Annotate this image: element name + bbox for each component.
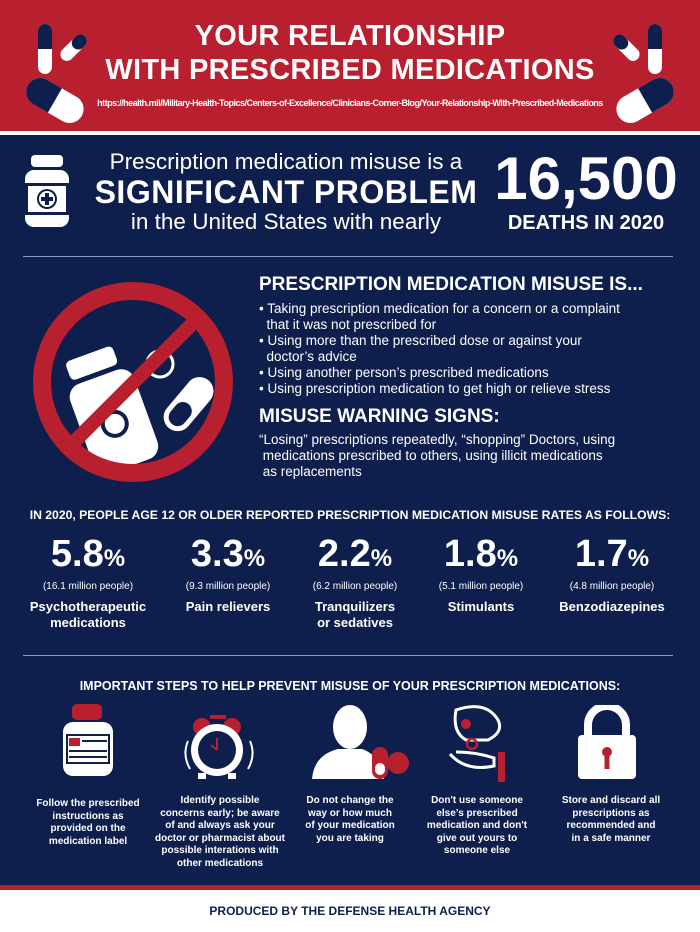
step 2: Identify possible (181, 795, 259, 806)
stat 2: (9.3 million people) (186, 581, 270, 592)
section: misuse definition: PRESCRIPTION MEDICATION MISUSE IS... (259, 274, 643, 295)
step 2: possible interations with (161, 845, 279, 856)
stat 5 (559, 533, 665, 614)
intro text: in the United States with nearly (131, 209, 441, 234)
step 3 (305, 795, 395, 844)
icon: person with pills (312, 705, 409, 779)
stat 1: (16.1 million people) (43, 581, 133, 592)
step 1: provided on the (50, 823, 126, 834)
step 4: someone else (444, 845, 510, 856)
title: YOUR RELATIONSHIP (195, 20, 505, 52)
step 1: medication label (49, 836, 127, 846)
stat 4: (5.1 million people) (439, 581, 523, 592)
intro text: Prescription medication misuse is a (110, 149, 462, 174)
step 3: way or how much (308, 808, 392, 818)
icon: no-sign over medications (33, 282, 233, 482)
step 1: Follow the prescribed (36, 798, 140, 809)
step 4: else’s prescribed (436, 808, 518, 818)
stat 3: 2.2% (318, 533, 392, 575)
section: misuse definition: medications prescribed to others, using illicit medications (263, 448, 603, 463)
step 1 (36, 798, 140, 846)
stat 2: 3.3% (191, 533, 265, 575)
stat 2: Pain relievers (186, 599, 270, 614)
stat 3 (313, 533, 397, 630)
step 5: Store and discard all (562, 795, 660, 806)
step texts (36, 795, 660, 868)
stat 3: (6.2 million people) (313, 581, 397, 592)
section: misuse definition: as replacements (263, 464, 362, 479)
step 4: medication and don't (427, 820, 527, 831)
stat 1: Psychotherapeutic (30, 599, 146, 614)
icon: padlock (578, 705, 636, 779)
step 2 (155, 795, 285, 868)
header band (0, 0, 700, 131)
heading: prevention steps: IMPORTANT STEPS TO HELP PREVENT MISUSE OF YOUR PRESCRIPTION MEDICATIONS: (80, 679, 620, 693)
icon: labeled bottle (63, 704, 113, 776)
step 5 (562, 795, 660, 844)
step 4 (427, 795, 527, 856)
step 4: Don't use someone (431, 795, 523, 806)
icon: alarm clock (184, 715, 254, 779)
step 3: of your medication (305, 820, 395, 831)
section: misuse definition: that it was not prescribed for (266, 317, 436, 332)
section: misuse definition: • Using prescription medication to get high or relieve stress (259, 381, 610, 396)
icon: bottle (25, 155, 69, 227)
heading: 2020 rates: IN 2020, PEOPLE AGE 12 OR OLDER REPORTED PRESCRIPTION MEDICATION MISUSE RATES AS FOLLOWS: (30, 508, 670, 522)
step 5: recommended and (567, 820, 655, 831)
stat 4: 1.8% (444, 533, 518, 575)
intro text: SIGNIFICANT PROBLEM (95, 174, 477, 210)
stat: 16,500 deaths: 16,500 (494, 145, 678, 212)
stat 4: Stimulants (448, 599, 514, 614)
stat 3: or sedatives (317, 615, 393, 630)
section: misuse definition (259, 274, 643, 479)
step 4: give out yours to (437, 832, 517, 844)
stats row (30, 533, 665, 630)
stat: 16,500 deaths: DEATHS IN 2020 (508, 212, 664, 234)
step 2: doctor or pharmacist about (155, 832, 285, 844)
stat 5: Benzodiazepines (559, 599, 665, 614)
step 3: Do not change the (306, 795, 394, 806)
stat 1 (30, 533, 146, 630)
title (105, 20, 595, 86)
section: misuse definition: MISUSE WARNING SIGNS: (259, 406, 500, 427)
section: misuse definition: • Using another person’s prescribed medications (259, 365, 549, 380)
title: WITH PRESCRIBED MEDICATIONS (105, 54, 595, 86)
step 2: concerns early; be aware (160, 808, 280, 818)
section: misuse definition: “Losing” prescriptions repeatedly, “shopping” Doctors, using (259, 432, 615, 447)
url: https://health.mil/Military-Health-Topics/Centers-of-Excellence/Clinicians-Corner-Blog/Your-Relationship-With-Prescribed-Medications (97, 98, 603, 108)
icon: pills left (26, 24, 87, 123)
section: misuse definition: • Using more than the prescribed dose or against your (259, 333, 582, 348)
step 5: in a safe manner (572, 832, 650, 844)
icon: pills right (613, 24, 674, 123)
icon: hands passing pill (449, 705, 505, 782)
stat 4 (439, 533, 523, 614)
footer credit: PRODUCED BY THE DEFENSE HEALTH AGENCY (209, 904, 491, 918)
stat 1: medications (50, 615, 126, 630)
stat 1: 5.8% (51, 533, 125, 575)
step 1: instructions as (52, 810, 124, 822)
step 5: prescriptions as (572, 808, 650, 818)
step 2: of and always ask your (165, 820, 275, 831)
section: misuse definition: doctor’s advice (266, 349, 357, 364)
stat 5: 1.7% (575, 533, 649, 575)
stat 3: Tranquilizers (315, 599, 395, 614)
intro text (95, 149, 477, 234)
stat 5: (4.8 million people) (570, 581, 654, 592)
stat 2 (186, 533, 270, 614)
section: misuse definition: • Taking prescription medication for a concern or a complaint (259, 301, 620, 316)
step 3: you are taking (316, 832, 384, 844)
step 2: other medications (177, 858, 263, 868)
